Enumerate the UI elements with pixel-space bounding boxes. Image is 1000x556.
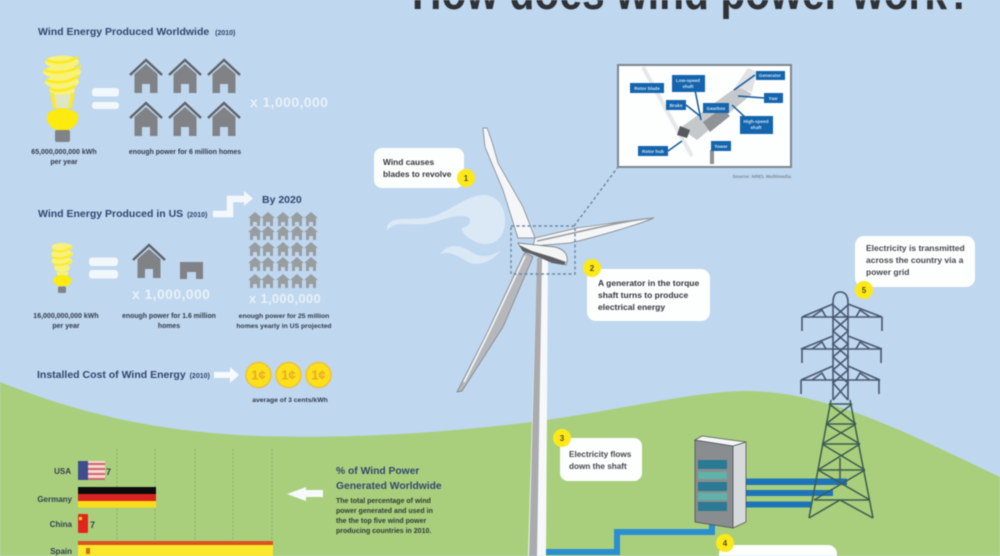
transmission tower <box>801 292 882 518</box>
callout 2 <box>583 259 710 321</box>
callout 5: 5 <box>862 286 867 295</box>
callout 3: down the shaft <box>569 462 627 471</box>
callout 1: blades to revolve <box>383 169 452 179</box>
panel: nacelle diagram: Low-speed <box>676 78 700 83</box>
icon: small light bulb <box>51 243 73 293</box>
panel: worldwide wind energy <box>31 26 328 166</box>
callout 5: power grid <box>866 267 909 277</box>
callout 4: 4 <box>723 539 728 548</box>
diagram labels <box>668 75 764 151</box>
panel: nacelle diagram: shaft <box>751 125 762 130</box>
panel: nacelle diagram: shaft <box>683 84 694 89</box>
bar: USA: USA <box>54 467 71 476</box>
heading: by 2020: By 2020 <box>262 194 302 206</box>
electrical cable <box>546 523 712 552</box>
icon: house and partial house <box>133 245 203 279</box>
bulb caption: 65,000,000,000 kWh <box>31 149 97 156</box>
cost caption: average of 3 cents/kWh <box>252 397 328 404</box>
nacelle <box>518 243 567 265</box>
bulb caption: 16,000,000,000 kWh <box>33 313 99 320</box>
callout 5: Electricity is transmitted <box>866 243 965 253</box>
substation cabinet <box>695 436 746 528</box>
callout 1: 1 <box>464 174 469 183</box>
blade: right <box>533 218 654 246</box>
callout 2: electrical energy <box>598 302 665 312</box>
panel: nacelle diagram: Generator <box>759 73 781 78</box>
2020 caption: homes yearly in US projected <box>236 323 332 330</box>
callout 3 <box>553 429 642 481</box>
panel: nacelle diagram <box>618 65 791 167</box>
multiplier: x 1,000,000 <box>132 286 210 302</box>
heading: worldwide: Wind Energy Produced Worldwide (2010) <box>38 26 235 38</box>
panel: nacelle diagram: Gearbox <box>707 106 726 111</box>
callout 2: A generator in the torque <box>598 278 699 288</box>
chart text: producing countries in 2010. <box>336 528 431 535</box>
multiplier 2020: x 1,000,000 <box>249 291 321 306</box>
panel: nacelle diagram: High-speed <box>743 119 769 124</box>
wind turbine <box>457 128 654 556</box>
green hill <box>0 382 1000 556</box>
panel: nacelle diagram: Rotor blade <box>634 86 660 91</box>
panel: nacelle diagram: Brake <box>670 103 683 108</box>
panel: nacelle diagram: Rotor hub <box>642 149 664 154</box>
bar chart: wind power by country <box>37 449 273 556</box>
callout 1 <box>374 148 475 188</box>
panel: US wind energy <box>33 191 332 330</box>
nacelle cutaway drawing <box>643 67 757 164</box>
bar: China <box>50 514 95 533</box>
bar: Germany: Germany <box>37 495 73 504</box>
heading: US: Wind Energy Produced in US (2010) <box>38 208 207 220</box>
panel: installed cost <box>37 362 331 404</box>
2020 caption: enough power for 25 million <box>239 313 329 320</box>
panel: nacelle diagram: Tower <box>714 144 728 149</box>
homes caption: enough power for 6 million homes <box>129 149 241 156</box>
tower <box>528 258 548 556</box>
icon: grid of 25 houses <box>248 212 318 288</box>
panel: nacelle diagram: Yaw <box>769 96 778 101</box>
bar: China: 7 <box>90 520 95 530</box>
grid cables <box>745 478 847 508</box>
wind swirl <box>387 195 505 264</box>
icon: large light bulb <box>43 56 81 142</box>
callout 2: shaft turns to produce <box>598 290 688 300</box>
bar: Germany <box>37 487 156 508</box>
callout 2: 2 <box>590 264 595 273</box>
blade: upper <box>483 128 535 238</box>
callout 5: across the country via a <box>866 255 964 265</box>
callout 3: Electricity flows <box>569 450 632 459</box>
bar: China: China <box>50 520 73 529</box>
equals sign <box>89 258 118 278</box>
chart text: The total percentage of wind <box>336 498 431 505</box>
icon: three coins <box>246 362 331 388</box>
chart heading: Generated Worldwide <box>336 481 442 492</box>
chart text: the the top five wind power <box>336 518 426 525</box>
tower lower section <box>809 400 873 518</box>
callout 1: Wind causes <box>383 157 434 167</box>
callout 5 <box>855 236 975 299</box>
heading: cost: Installed Cost of Wind Energy (2010) <box>37 369 210 381</box>
arrow: step up to 2020 <box>213 199 246 214</box>
multiplier: x 1,000,000 <box>250 94 328 110</box>
dashed zoom box <box>511 167 618 274</box>
callout 3: 3 <box>560 434 565 443</box>
bar: Spain: Spain <box>50 547 72 556</box>
chart heading: % of Wind Power <box>336 466 419 477</box>
blade: lower <box>457 252 533 392</box>
arrow: to chart <box>287 487 323 501</box>
arrow: to coins <box>214 367 239 383</box>
homes caption: enough power for 1.6 million <box>122 313 216 320</box>
bulb caption: per year <box>52 323 80 330</box>
bar: Spain <box>50 541 273 556</box>
bar: USA <box>54 461 111 480</box>
callout 4 <box>716 534 837 556</box>
chart description <box>336 466 442 535</box>
bulb caption: per year <box>50 159 78 166</box>
equals sign <box>92 88 119 109</box>
tower upper section <box>801 292 882 400</box>
bar: USA: 7 <box>106 467 111 477</box>
chart text: power generated and used in <box>336 508 433 515</box>
icon: six houses <box>130 60 240 136</box>
diagram source: Source: NREL Multimedia <box>732 174 791 180</box>
homes caption: homes <box>158 323 180 330</box>
